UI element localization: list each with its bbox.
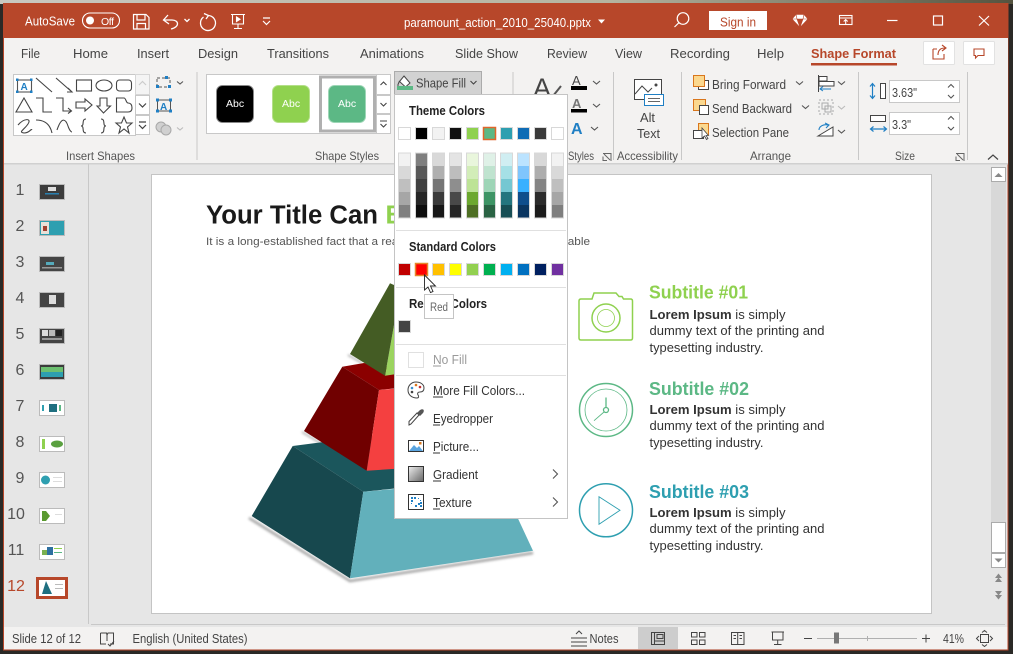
align, group and rotate icons: [818, 75, 845, 136]
ribbon tabs: Help: [757, 46, 784, 61]
selection pane: Selection Pane: [712, 125, 789, 140]
autosave toggle: Off: [101, 16, 114, 28]
icon: file name caret: [598, 20, 605, 24]
pyramid shadows: [249, 355, 533, 581]
zoom slider: [804, 632, 964, 646]
file name: paramount_action_2010_25040.pptx: [404, 15, 591, 30]
item 3: [580, 482, 824, 553]
title bar: [4, 4, 1008, 38]
icon: play: [580, 484, 632, 537]
ribbon tabs: Recording: [670, 46, 730, 61]
body 2: dummy text of the printing and: [650, 419, 824, 433]
theme tints grid: [398, 153, 564, 218]
thumbnail 10: 10: [7, 506, 25, 523]
window controls: [887, 16, 989, 26]
no fill item: No Fill: [433, 353, 467, 367]
ribbon: [4, 38, 1008, 164]
tooltip: red: Red: [430, 302, 448, 314]
thumbnail 4: [16, 290, 64, 308]
icon: search: [674, 13, 689, 27]
height field: 3.63": [892, 85, 917, 100]
texture item: [408, 494, 558, 510]
icon: alt text: [634, 80, 664, 106]
workspace dividers: [88, 164, 1005, 624]
recent colors heading: Recent Colors: [409, 297, 487, 311]
thumbnail 9: 9: [16, 470, 25, 487]
icon: camera: [579, 293, 632, 340]
thumbnail 11: 11: [8, 542, 24, 559]
more fill colors item: More Fill Colors...: [433, 384, 525, 398]
item 1: [579, 282, 824, 355]
picture item: Picture...: [433, 440, 479, 454]
insert shapes gallery: [14, 74, 183, 163]
ribbon tabs: Animations: [360, 46, 424, 61]
sign in button: Sign in: [720, 16, 756, 30]
eyedropper item: Eyedropper: [433, 412, 493, 426]
icon: fit to window: [976, 630, 992, 646]
standard colors heading: Standard Colors: [409, 240, 496, 254]
ribbon tabs: Review: [547, 46, 588, 61]
style swatch: teal green: [328, 86, 366, 122]
ribbon tabs: Design: [198, 46, 238, 61]
thumbnail 5: [16, 326, 64, 344]
body 1: typesetting industry.: [650, 341, 764, 355]
thumbnail 1: [16, 182, 64, 200]
send backward: Send Backward: [712, 101, 792, 116]
word art styles: A: [572, 73, 581, 88]
bring forward: Bring Forward: [712, 77, 786, 92]
icon: redo: [200, 14, 216, 31]
ribbon tabs: View: [615, 46, 643, 61]
arrange group: Arrange: [750, 149, 791, 163]
vertical scrollbar: [991, 167, 1006, 600]
share button: [924, 42, 954, 64]
thumbnail 4: 4: [16, 290, 25, 307]
ribbon tabs: Transitions: [267, 46, 329, 61]
thumbnail 9: [16, 470, 64, 488]
style swatch: green: [272, 86, 310, 122]
subtitle 3: Subtitle #03: [649, 482, 749, 502]
notes button: Notes: [590, 632, 618, 646]
sign in button: [709, 11, 767, 30]
thumbnail 3: [16, 254, 64, 272]
body 3: typesetting industry.: [650, 539, 764, 553]
word art styles: Styles: [568, 149, 594, 163]
body 1: dummy text of the printing and: [650, 324, 824, 338]
word art styles: A: [571, 121, 583, 138]
slide counter: Slide 12 of 12: [12, 632, 81, 646]
shape fill button: Shape Fill: [416, 76, 466, 90]
icon: mouse cursor: [424, 275, 436, 292]
edit shape icons: A: [160, 102, 167, 113]
icon: save: [134, 14, 149, 29]
thumbnail 12, selected: 12: [7, 578, 25, 595]
shape fill button: [394, 72, 482, 94]
texture item: Texture: [433, 496, 472, 510]
no fill item: [408, 352, 467, 368]
gradient item: Gradient: [433, 468, 478, 482]
body 1: [650, 308, 824, 355]
normal view, active: [638, 627, 678, 649]
thumbnail 6: 6: [16, 362, 25, 379]
thumbnail 12, selected: [7, 578, 66, 598]
slide: [152, 174, 932, 614]
language: English (United States): [132, 632, 248, 646]
thumbnail 8: 8: [16, 434, 25, 451]
shape fill dropdown menu: [394, 94, 568, 518]
icon: ribbon display: [840, 16, 852, 24]
label: insert shapes: Insert Shapes: [66, 149, 135, 163]
accessibility group: Accessibility: [617, 149, 678, 163]
more fill colors item: [408, 382, 525, 398]
3D pyramid: [249, 283, 533, 581]
teal tier: [252, 436, 533, 578]
gradient item: [408, 466, 558, 482]
icon: paint bucket: [398, 76, 410, 87]
body 3: [650, 506, 824, 553]
subtitle 2: Subtitle #02: [649, 379, 749, 399]
body 1: Lorem Ipsum is simply: [650, 308, 786, 322]
item 2: [580, 379, 824, 450]
status bar: [4, 627, 1008, 649]
green tier: [350, 283, 410, 376]
autosave toggle: [25, 13, 120, 28]
menu separators: [396, 230, 566, 376]
size group: [870, 80, 998, 163]
comment button: [964, 42, 994, 64]
thumbnail 7: 7: [16, 398, 25, 415]
word art styles: A: [572, 96, 582, 111]
thumbnail 6: [16, 362, 64, 380]
picture item: [408, 440, 479, 454]
ribbon tabs: Shape Format: [811, 46, 897, 61]
body 2: Lorem Ipsum is simply: [650, 403, 786, 417]
group separators: [197, 72, 968, 160]
ribbon tabs: Slide Show: [455, 46, 519, 61]
style swatch: black: [216, 86, 254, 122]
icon: shape grid: A: [20, 82, 28, 93]
bring forward: [694, 76, 803, 92]
ribbon tabs: File: [21, 46, 40, 61]
width field: 3.3": [892, 117, 911, 132]
accessibility group: [617, 80, 678, 163]
word art styles: [533, 73, 611, 163]
size group: Size: [895, 149, 915, 163]
icon: quick access menu: [263, 18, 270, 24]
tooltip: red: [424, 294, 454, 318]
thumbnail 11: [8, 542, 64, 560]
style swatch: teal green: Abc: [338, 98, 356, 110]
label: shape styles: Shape Styles: [315, 149, 379, 163]
zoom slider: 41%: [943, 632, 964, 646]
red tier: [304, 363, 500, 471]
thumbnail 7: [16, 398, 64, 416]
thumbnail 3: 3: [16, 254, 25, 271]
thumbnail 5: 5: [16, 326, 25, 343]
accessibility group: Alt: [640, 110, 655, 125]
thumbnail 2: [16, 218, 64, 236]
ribbon tabs: Home: [73, 46, 108, 61]
ribbon tabs: [21, 46, 897, 66]
icon: shape grid: [16, 78, 132, 133]
slide thumbnails panel: [7, 182, 66, 598]
style swatch: green: Abc: [282, 98, 300, 110]
arrange group: [694, 75, 845, 163]
ribbon tabs: Insert: [137, 46, 169, 61]
styles scroll buttons: [376, 74, 390, 134]
thumbnail 1: 1: [16, 182, 25, 199]
notes button: [571, 631, 618, 646]
slide title: Your Title Can: [206, 202, 378, 230]
recent color swatch: [398, 320, 410, 332]
accessibility group: Text: [637, 126, 660, 141]
style swatch: black: Abc: [226, 98, 244, 110]
thumbnail 10: [7, 506, 64, 524]
autosave toggle: AutoSave: [25, 14, 75, 28]
gallery scroll buttons: [136, 74, 150, 134]
shape styles gallery: [206, 74, 390, 163]
icon: collapse ribbon: [988, 155, 998, 160]
body 3: Lorem Ipsum is simply: [650, 506, 786, 520]
icon: spell check book: [100, 633, 114, 646]
view buttons: [692, 632, 784, 644]
subtitle 1: Subtitle #01: [649, 282, 748, 302]
thumbnail 8: [16, 434, 64, 452]
slide title: Be Edited: [386, 202, 503, 230]
theme colors heading: Theme Colors: [409, 104, 485, 118]
body 2: typesetting industry.: [650, 436, 764, 450]
word art styles: A: [533, 73, 551, 103]
edit shape icons: [156, 76, 183, 135]
theme colors row: [398, 128, 564, 140]
icon: diamond: [792, 14, 808, 28]
body 2: [650, 403, 824, 450]
icon: undo: [164, 15, 190, 29]
thumbnail 2: 2: [16, 218, 25, 235]
slide subtitle: It is a long-established fact that a reader will be distracted by the readable: [206, 236, 590, 248]
selection pane: [694, 124, 789, 140]
body 3: dummy text of the printing and: [650, 522, 824, 536]
icon: present: [231, 14, 245, 28]
eyedropper item: [409, 409, 493, 426]
icon: clock: [580, 384, 632, 436]
standard colors row: [398, 264, 564, 276]
